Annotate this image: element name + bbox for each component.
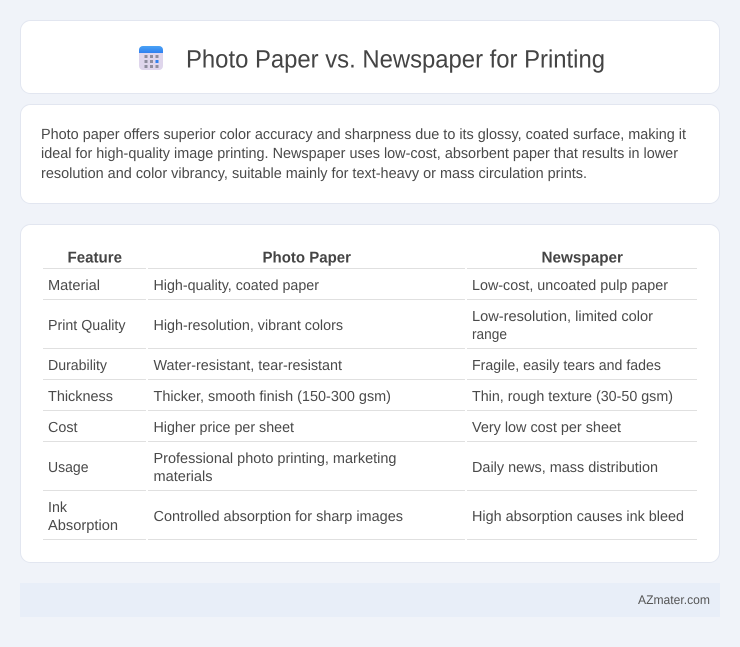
row: ink absorption — [48, 500, 684, 534]
text block: introduction — [41, 127, 686, 182]
row: print quality: Print Quality — [48, 318, 126, 334]
icon: calendar — [139, 46, 163, 70]
footer credit: AZmater.com — [638, 593, 710, 607]
text block: introduction: Photo paper offers superior color accuracy and sharpness due to its glossy, coated surface, making it — [41, 127, 686, 143]
text block: introduction: ideal for high-quality image printing. Newspaper uses low-cost, absorbent paper that results in lower — [41, 146, 678, 162]
row: thickness: Thickness — [48, 389, 113, 405]
table header: Newspaper — [542, 250, 623, 267]
footer bar — [20, 583, 720, 617]
panel: introduction — [20, 104, 720, 204]
row: ink absorption: Absorption — [48, 518, 118, 534]
row: cost — [48, 420, 621, 436]
row: usage: Usage — [48, 460, 88, 476]
text block: introduction: resolution and color vibrancy, suitable mainly for text-heavy or mass circulation prints. — [41, 166, 587, 182]
row: thickness: Thicker, smooth finish (150-300 gsm) — [154, 389, 391, 405]
row: material — [48, 278, 668, 294]
row: thickness — [48, 389, 673, 405]
row: print quality: Low-resolution, limited color — [472, 309, 653, 325]
row: usage: Daily news, mass distribution — [472, 460, 658, 476]
row: cost: Very low cost per sheet — [472, 420, 621, 436]
row: durability: Durability — [48, 358, 108, 374]
row: durability: Water-resistant, tear-resistant — [154, 358, 342, 374]
row: print quality: High-resolution, vibrant colors — [154, 318, 343, 334]
row: cost: Cost — [48, 420, 78, 436]
row: print quality — [48, 309, 653, 343]
row: thickness: Thin, rough texture (30-50 gsm) — [472, 389, 673, 405]
row: material: Material — [48, 278, 100, 294]
row: durability — [48, 358, 661, 374]
row: ink absorption: Controlled absorption for sharp images — [154, 509, 403, 525]
row: usage: Professional photo printing, marketing — [154, 451, 396, 467]
row: ink absorption: High absorption causes ink bleed — [472, 509, 684, 525]
row: material: Low-cost, uncoated pulp paper — [472, 278, 668, 294]
row: durability: Fragile, easily tears and fades — [472, 358, 661, 374]
row: print quality: range — [472, 327, 507, 343]
row: material: High-quality, coated paper — [154, 278, 319, 294]
row: cost: Higher price per sheet — [154, 420, 294, 436]
panel: comparison table — [20, 224, 720, 562]
row: usage — [48, 451, 658, 485]
table header: Photo Paper — [262, 250, 351, 267]
row: usage: materials — [154, 469, 212, 485]
table header — [68, 250, 623, 267]
panel: title card — [20, 20, 720, 94]
title: Photo Paper vs. Newspaper for Printing — [186, 46, 605, 74]
table header: Feature — [68, 250, 122, 267]
row: ink absorption: Ink — [48, 500, 68, 516]
